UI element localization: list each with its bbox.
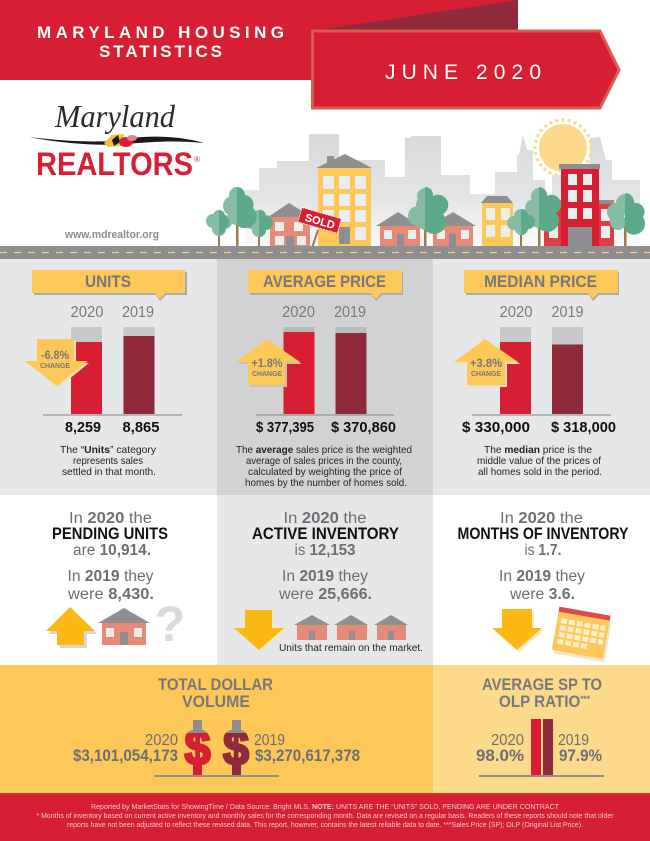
heading: units: UNITS	[85, 272, 131, 291]
text: months of inventory: is 1.7.	[524, 542, 562, 559]
bar chart: median price	[462, 304, 616, 436]
change arrow: median price	[454, 339, 520, 387]
text: pending units: are 10,914.	[73, 542, 151, 559]
description: units	[60, 444, 157, 478]
bar chart: median price: 2019	[552, 304, 584, 321]
illustration: city skyline	[206, 120, 645, 248]
2020 total: 2020	[145, 732, 178, 749]
footer notes: reports have not been adjusted to reflect these revised data. This report, however, contains the latest reliable data to date. ***Sales Price (SP); OLP (Original List Price).	[67, 820, 583, 829]
date banner	[312, 31, 619, 108]
text: pending units: In 2020 the	[69, 510, 152, 527]
description: median price: all homes sold in the period.	[478, 466, 602, 478]
heading: total dollar volume: VOLUME	[182, 693, 250, 711]
text: active inventory: In 2019 they	[282, 568, 368, 585]
website url: www.mdrealtor.org	[64, 229, 159, 241]
description: average price: average of sales prices in the county,	[246, 455, 402, 467]
icon: calendar	[551, 607, 613, 662]
title: STATISTICS	[99, 42, 222, 61]
panel: average sp to olp ratio	[433, 665, 650, 793]
change arrow: median price: +3.8%	[470, 356, 502, 370]
2020 ratio: 98.0%	[476, 747, 524, 765]
small yellow building	[481, 196, 513, 246]
text: pending units: were 8,430.	[67, 586, 154, 603]
trees	[206, 187, 645, 246]
change arrow: average price: CHANGE	[252, 371, 282, 378]
bar chart: average price: $ 377,395	[256, 419, 314, 436]
bar chart: ratio	[479, 719, 604, 777]
description: units: settled in that month.	[62, 466, 156, 478]
bar chart: units: 2019	[122, 304, 154, 321]
heading: total dollar volume	[158, 676, 273, 711]
date banner: JUNE 2020	[385, 61, 541, 84]
logo: Maryland Realtors: REALTORS	[36, 146, 193, 182]
icon: dollar signs: $	[223, 720, 249, 776]
description: median price	[477, 444, 602, 478]
text: months of inventory: In 2020 the	[500, 510, 583, 527]
road	[0, 246, 650, 259]
house with sold sign	[268, 203, 312, 246]
sold sign	[298, 208, 341, 248]
header band	[0, 0, 518, 80]
icon: dollar signs: $	[184, 720, 211, 776]
change arrow: units	[25, 339, 89, 388]
panel: units	[0, 259, 217, 495]
sun	[535, 120, 591, 176]
icon: up arrow	[46, 607, 97, 648]
heading: total dollar volume: TOTAL DOLLAR	[158, 676, 273, 694]
heading: average price	[248, 270, 403, 301]
bar chart: average price: 2020	[282, 304, 315, 321]
description: average price	[236, 444, 412, 489]
text: months of inventory: In 2019 they	[499, 568, 585, 585]
heading: median price: MEDIAN PRICE	[484, 272, 597, 291]
description: average price: calculated by weighting the price of	[248, 466, 402, 478]
description: average price: The average sales price is the weighted	[236, 444, 412, 456]
heading: sp to olp ratio: ***	[580, 694, 590, 704]
icon: dollar signs	[154, 720, 279, 777]
text: active inventory: In 2020 the	[284, 510, 366, 527]
bar chart: median price: 2020	[500, 304, 533, 321]
text: pending units: PENDING UNITS	[52, 524, 168, 543]
logo: Maryland Realtors	[29, 98, 204, 182]
bar chart: units: 8,259	[65, 419, 101, 436]
icon: three houses	[294, 615, 408, 640]
text: active inventory: were 25,666.	[278, 586, 372, 603]
panel: average price	[217, 259, 433, 495]
panel: median price	[433, 259, 650, 495]
2020 total: $3,101,054,173	[73, 747, 178, 765]
2019 total: $3,270,617,378	[255, 747, 360, 765]
2019 total	[254, 732, 360, 765]
heading: sp to olp ratio: AVERAGE SP TO	[482, 676, 602, 694]
heading: units	[32, 270, 187, 301]
logo: Maryland Realtors: ®	[194, 155, 200, 164]
icon: down arrow	[492, 609, 544, 652]
change arrow: average price: +1.8%	[252, 356, 283, 370]
logo: Maryland Realtors: Maryland	[54, 98, 176, 134]
bar chart: average price: 2019	[334, 304, 366, 321]
description: average price: homes by the number of homes sold.	[245, 477, 407, 489]
text: active inventory: ACTIVE INVENTORY	[252, 524, 400, 543]
2020 total	[73, 732, 178, 765]
footer notes: Reported by MarketStats for ShowingTime / Data Source: Bright MLS. NOTE: UNITS ARE THE “UNITS” SOLD, PENDING ARE UNDER CONTRACT	[91, 802, 559, 811]
2020 ratio	[476, 732, 524, 765]
text: pending units	[52, 510, 168, 603]
title: MARYLAND HOUSING	[37, 23, 284, 42]
icon: question mark: ?	[155, 596, 185, 652]
bar chart: average price	[256, 304, 396, 436]
title	[37, 23, 284, 61]
text: active inventory	[252, 510, 400, 603]
footer notes	[36, 802, 614, 829]
bar chart: units	[43, 304, 182, 436]
heading: average price: AVERAGE PRICE	[263, 272, 386, 291]
caption: Units that remain on the market.	[279, 643, 423, 654]
bar chart: median price: $ 330,000	[462, 419, 530, 436]
2020 ratio: 2020	[491, 732, 524, 749]
panel: pending units	[0, 495, 217, 665]
panel: active inventory	[217, 495, 433, 665]
change arrow: units: CHANGE	[40, 363, 70, 370]
bar chart: units: 8,865	[122, 419, 160, 436]
bar chart: median price: $ 318,000	[551, 419, 616, 436]
change arrow: units: -6.8%	[41, 348, 69, 362]
heading: median price	[464, 270, 619, 301]
skyline silhouettes	[245, 134, 640, 246]
change arrow: median price: CHANGE	[471, 371, 501, 378]
description: median price: middle value of the prices of	[477, 455, 601, 467]
yellow apartment building	[316, 154, 372, 246]
text: months of inventory	[458, 510, 629, 603]
heading: sp to olp ratio: OLP RATIO	[499, 693, 587, 711]
sold sign: SOLD	[303, 212, 336, 232]
description: median price: The median price is the	[484, 444, 592, 456]
red building	[542, 164, 614, 246]
row houses	[376, 212, 476, 246]
footer	[0, 793, 650, 841]
text: months of inventory: were 3.6.	[509, 586, 575, 603]
description: units: The “Units” category	[60, 444, 157, 456]
heading: sp to olp ratio	[482, 676, 602, 711]
description: units: represents sales	[73, 455, 143, 467]
footer notes: * Months of inventory based on current active inventory and monthly sales for the corresponding month. Data are revised on a regular basis. Readers of these reports should note that older	[36, 811, 614, 820]
panel: months of inventory	[433, 495, 650, 665]
panel: total dollar volume	[0, 665, 433, 793]
2019 ratio: 2019	[558, 732, 589, 749]
2019 total: 2019	[254, 732, 285, 749]
text: pending units: In 2019 they	[68, 568, 154, 585]
bar chart: average price: $ 370,860	[331, 419, 396, 436]
icon: house	[98, 608, 150, 645]
bar chart: units: 2020	[70, 304, 104, 321]
icon: down arrow	[234, 610, 286, 652]
text: active inventory: is 12,153	[294, 542, 356, 559]
change arrow: average price	[236, 339, 302, 387]
2019 ratio	[558, 732, 602, 765]
2019 ratio: 97.9%	[559, 747, 602, 765]
